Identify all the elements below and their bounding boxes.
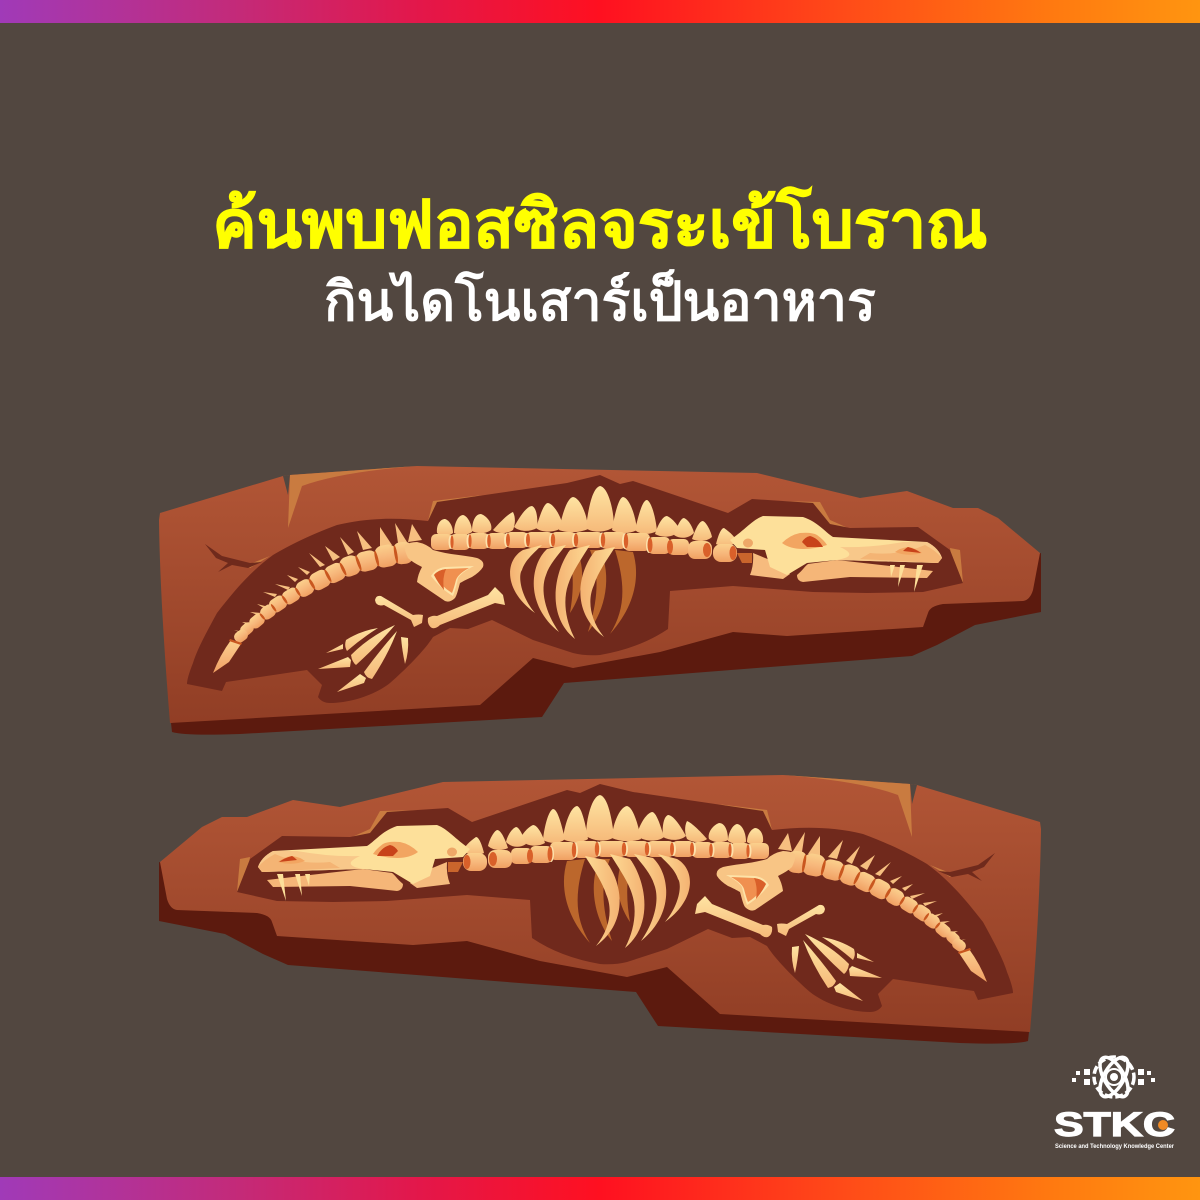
- logo wordmark: STKC: [1054, 1106, 1175, 1144]
- fossil cavity: [187, 475, 963, 703]
- logo pixels: [1072, 1069, 1155, 1085]
- slab dark side: [171, 553, 1041, 735]
- orange rock ledges: [232, 466, 963, 583]
- top gradient bar: [0, 0, 1200, 23]
- fossil slab bottom (mirrored): [159, 775, 1041, 1044]
- bottom gradient bar: [0, 1177, 1200, 1200]
- vertebra behind skull: [737, 553, 752, 563]
- skull back: [750, 553, 790, 579]
- logo orange dot: [1158, 1120, 1168, 1130]
- teeth: [890, 565, 895, 577]
- surface crack: [205, 544, 262, 572]
- title: ค้นพบฟอสซิลจระเข้โบราณ: [213, 187, 987, 261]
- lower jaw: [797, 560, 933, 582]
- logo: [1054, 1053, 1175, 1150]
- tail vertebrae: [213, 541, 414, 673]
- icon: atom: [1094, 1053, 1134, 1101]
- logo tagline: Science and Technology Knowledge Center: [1055, 1144, 1175, 1150]
- tail spikes: [234, 523, 422, 633]
- femur bones: [375, 587, 505, 628]
- crack wedge: [283, 475, 290, 495]
- hip bone: [405, 542, 483, 602]
- dark back ribs: [568, 550, 636, 634]
- ribs: [510, 545, 615, 639]
- skull: [730, 516, 942, 592]
- foot bones: [318, 625, 408, 692]
- fossil slab top: [159, 466, 1041, 735]
- cranium and snout: [730, 516, 942, 575]
- slab top face: [159, 466, 1040, 723]
- spine body vertebrae: [431, 532, 737, 562]
- subtitle: กินไดโนเสาร์เป็นอาหาร: [324, 272, 876, 332]
- dorsal scales: [437, 486, 737, 546]
